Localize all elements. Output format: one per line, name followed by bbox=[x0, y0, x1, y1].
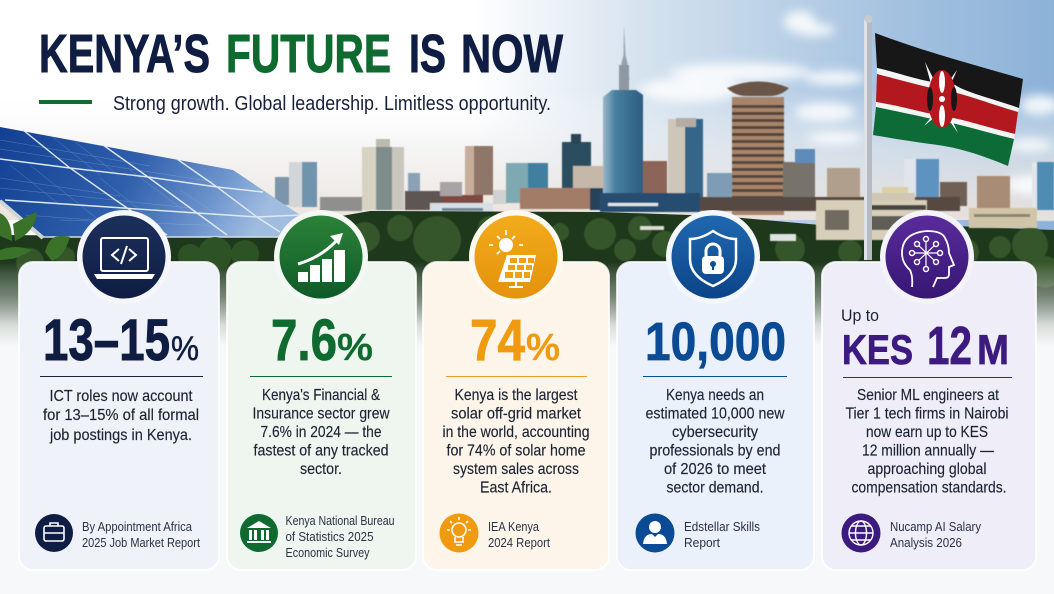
source bbox=[890, 519, 981, 550]
icon: globe bbox=[842, 514, 880, 552]
description bbox=[646, 387, 785, 496]
statistic: % bbox=[337, 327, 373, 369]
icon: laptop code bbox=[77, 210, 171, 304]
Kenyan flag bbox=[873, 33, 1023, 166]
icon: shield lock bbox=[666, 210, 760, 304]
source bbox=[684, 519, 760, 550]
description: compensation standards. bbox=[852, 480, 1006, 496]
description: Kenya's Financial & bbox=[262, 387, 380, 404]
divider bbox=[250, 376, 392, 377]
description: 12 million annually — bbox=[862, 442, 994, 460]
description: for 74% of solar home bbox=[446, 442, 586, 460]
description: Kenya is the largest bbox=[454, 387, 578, 404]
description: professionals by end bbox=[650, 442, 780, 460]
flag pole bbox=[864, 15, 872, 260]
icon: briefcase bbox=[35, 514, 73, 552]
description bbox=[43, 388, 199, 444]
title: FUTURE bbox=[226, 24, 391, 84]
icon: sun and solar panel bbox=[469, 210, 563, 304]
source bbox=[286, 513, 394, 560]
building: UAP tower bbox=[603, 25, 643, 193]
statistic bbox=[842, 316, 1009, 376]
description: estimated 10,000 new bbox=[646, 406, 785, 422]
description: now earn up to KES bbox=[866, 424, 988, 441]
description: in the world, accounting bbox=[442, 424, 590, 441]
divider bbox=[843, 377, 1012, 378]
skyline bbox=[275, 25, 1054, 218]
divider bbox=[643, 376, 787, 377]
description: Tier 1 tech firms in Nairobi bbox=[846, 406, 1008, 422]
description: sector demand. bbox=[666, 480, 764, 496]
description: Kenya needs an bbox=[666, 387, 764, 404]
panel: ICT roles bbox=[19, 210, 219, 570]
subtitle: Strong growth. Global leadership. Limitless opportunity. bbox=[113, 93, 551, 115]
icon: growth chart bbox=[274, 210, 368, 304]
description: sector. bbox=[300, 461, 342, 478]
description bbox=[442, 387, 590, 496]
description: of 2026 to meet bbox=[664, 461, 767, 478]
statistic: 7.6 bbox=[271, 308, 337, 373]
description: ICT roles now account bbox=[50, 388, 193, 405]
description: for 13–15% of all formal bbox=[43, 407, 199, 424]
source bbox=[82, 519, 200, 550]
panel: cybersecurity bbox=[617, 210, 814, 570]
source: Analysis 2026 bbox=[890, 535, 962, 550]
description: Insurance sector grew bbox=[252, 406, 390, 422]
source: Edstellar Skills bbox=[684, 519, 760, 534]
title bbox=[39, 24, 563, 84]
trees bbox=[0, 211, 1054, 346]
description: solar off-grid market bbox=[451, 406, 582, 422]
statistic: 10,000 bbox=[645, 312, 786, 372]
icon: bank bbox=[240, 514, 278, 552]
icon: person bbox=[636, 514, 674, 552]
subtitle accent line bbox=[39, 100, 92, 104]
description: cybersecurity bbox=[672, 424, 758, 441]
statistic: % bbox=[171, 330, 199, 368]
statistic: 74 bbox=[470, 308, 525, 373]
divider bbox=[40, 376, 203, 377]
foreground buildings bbox=[640, 187, 1054, 241]
source bbox=[488, 519, 550, 550]
panel: financial sector bbox=[227, 210, 416, 570]
title: IS bbox=[409, 24, 446, 84]
icon: light bulb bbox=[440, 514, 478, 552]
divider bbox=[446, 376, 587, 377]
panel: AI salaries bbox=[822, 210, 1036, 570]
description: fastest of any tracked bbox=[254, 442, 388, 460]
building: KICC tower bbox=[727, 82, 789, 215]
description: East Africa. bbox=[480, 480, 552, 496]
source: Kenya National Bureau bbox=[286, 513, 394, 528]
statistic: 12 bbox=[927, 316, 972, 376]
label: up to: Up to bbox=[841, 306, 879, 325]
icon: AI head bbox=[880, 210, 974, 304]
description: 7.6% in 2024 — the bbox=[260, 424, 382, 441]
panel: solar market bbox=[423, 210, 609, 570]
source: 2025 Job Market Report bbox=[82, 535, 200, 550]
source: 2024 Report bbox=[488, 535, 550, 550]
title: KENYA’S bbox=[39, 24, 210, 84]
statistic: KES bbox=[842, 326, 913, 373]
title: NOW bbox=[461, 24, 563, 84]
description: approaching global bbox=[868, 461, 986, 478]
source: IEA Kenya bbox=[488, 519, 540, 534]
source: Economic Survey bbox=[286, 545, 370, 560]
statistic: 13–15 bbox=[43, 308, 170, 373]
source: Report bbox=[684, 535, 720, 550]
statistic: M bbox=[977, 326, 1009, 373]
description: system sales across bbox=[453, 461, 579, 478]
description bbox=[252, 387, 390, 478]
description bbox=[846, 387, 1008, 496]
source: Nucamp AI Salary bbox=[890, 519, 981, 534]
description: Senior ML engineers at bbox=[857, 387, 999, 404]
statistic: % bbox=[526, 327, 560, 369]
source: of Statistics 2025 bbox=[286, 529, 374, 544]
solar panels bbox=[0, 127, 300, 238]
foliage under the panels bbox=[0, 212, 259, 271]
source: By Appointment Africa bbox=[82, 519, 193, 534]
description: job postings in Kenya. bbox=[49, 427, 192, 444]
